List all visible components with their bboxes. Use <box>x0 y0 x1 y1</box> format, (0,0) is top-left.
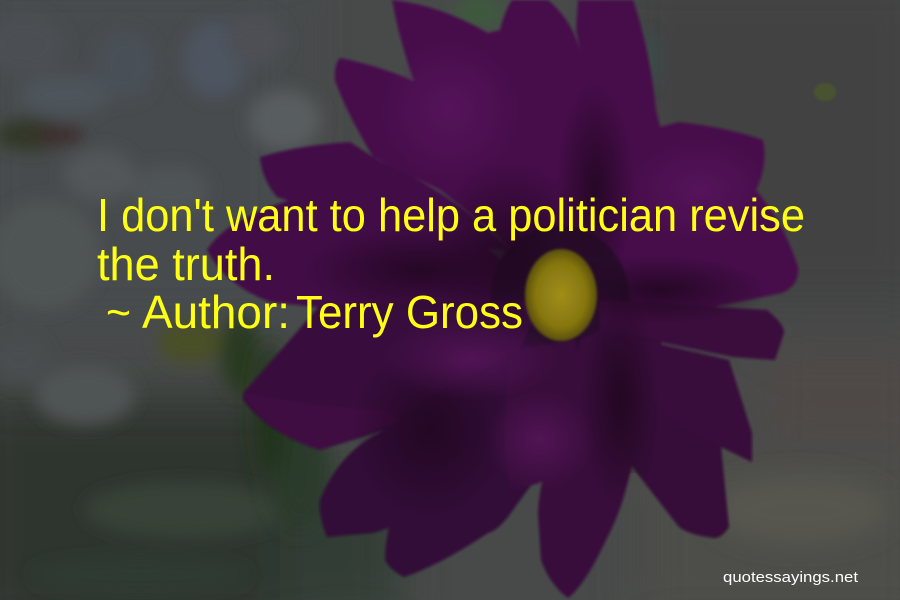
right lower petal <box>600 300 784 360</box>
central fill behind the yellow core <box>490 225 630 375</box>
author attribution: Author: <box>142 286 290 338</box>
upper left petal <box>335 58 530 260</box>
author attribution: Terry Gross <box>296 286 523 338</box>
author attribution: ~ <box>106 286 131 338</box>
upper back petals <box>392 0 798 330</box>
quote text <box>97 189 805 338</box>
lower petals <box>320 345 530 537</box>
flower: purple petals <box>207 0 798 598</box>
site watermark: quotessayings.net <box>723 569 859 586</box>
leaf speck top right <box>814 83 836 101</box>
quote line 1: I don't want to help a politician revise <box>97 189 805 241</box>
lower left petal <box>243 300 540 450</box>
author attribution <box>106 286 523 338</box>
flower: yellow centre <box>525 249 597 341</box>
bottom petal <box>538 400 650 598</box>
flower: soft petal shading <box>328 75 748 488</box>
left petal <box>260 142 510 250</box>
middle left petal <box>207 200 540 330</box>
quote line 2: the truth. <box>97 238 275 290</box>
